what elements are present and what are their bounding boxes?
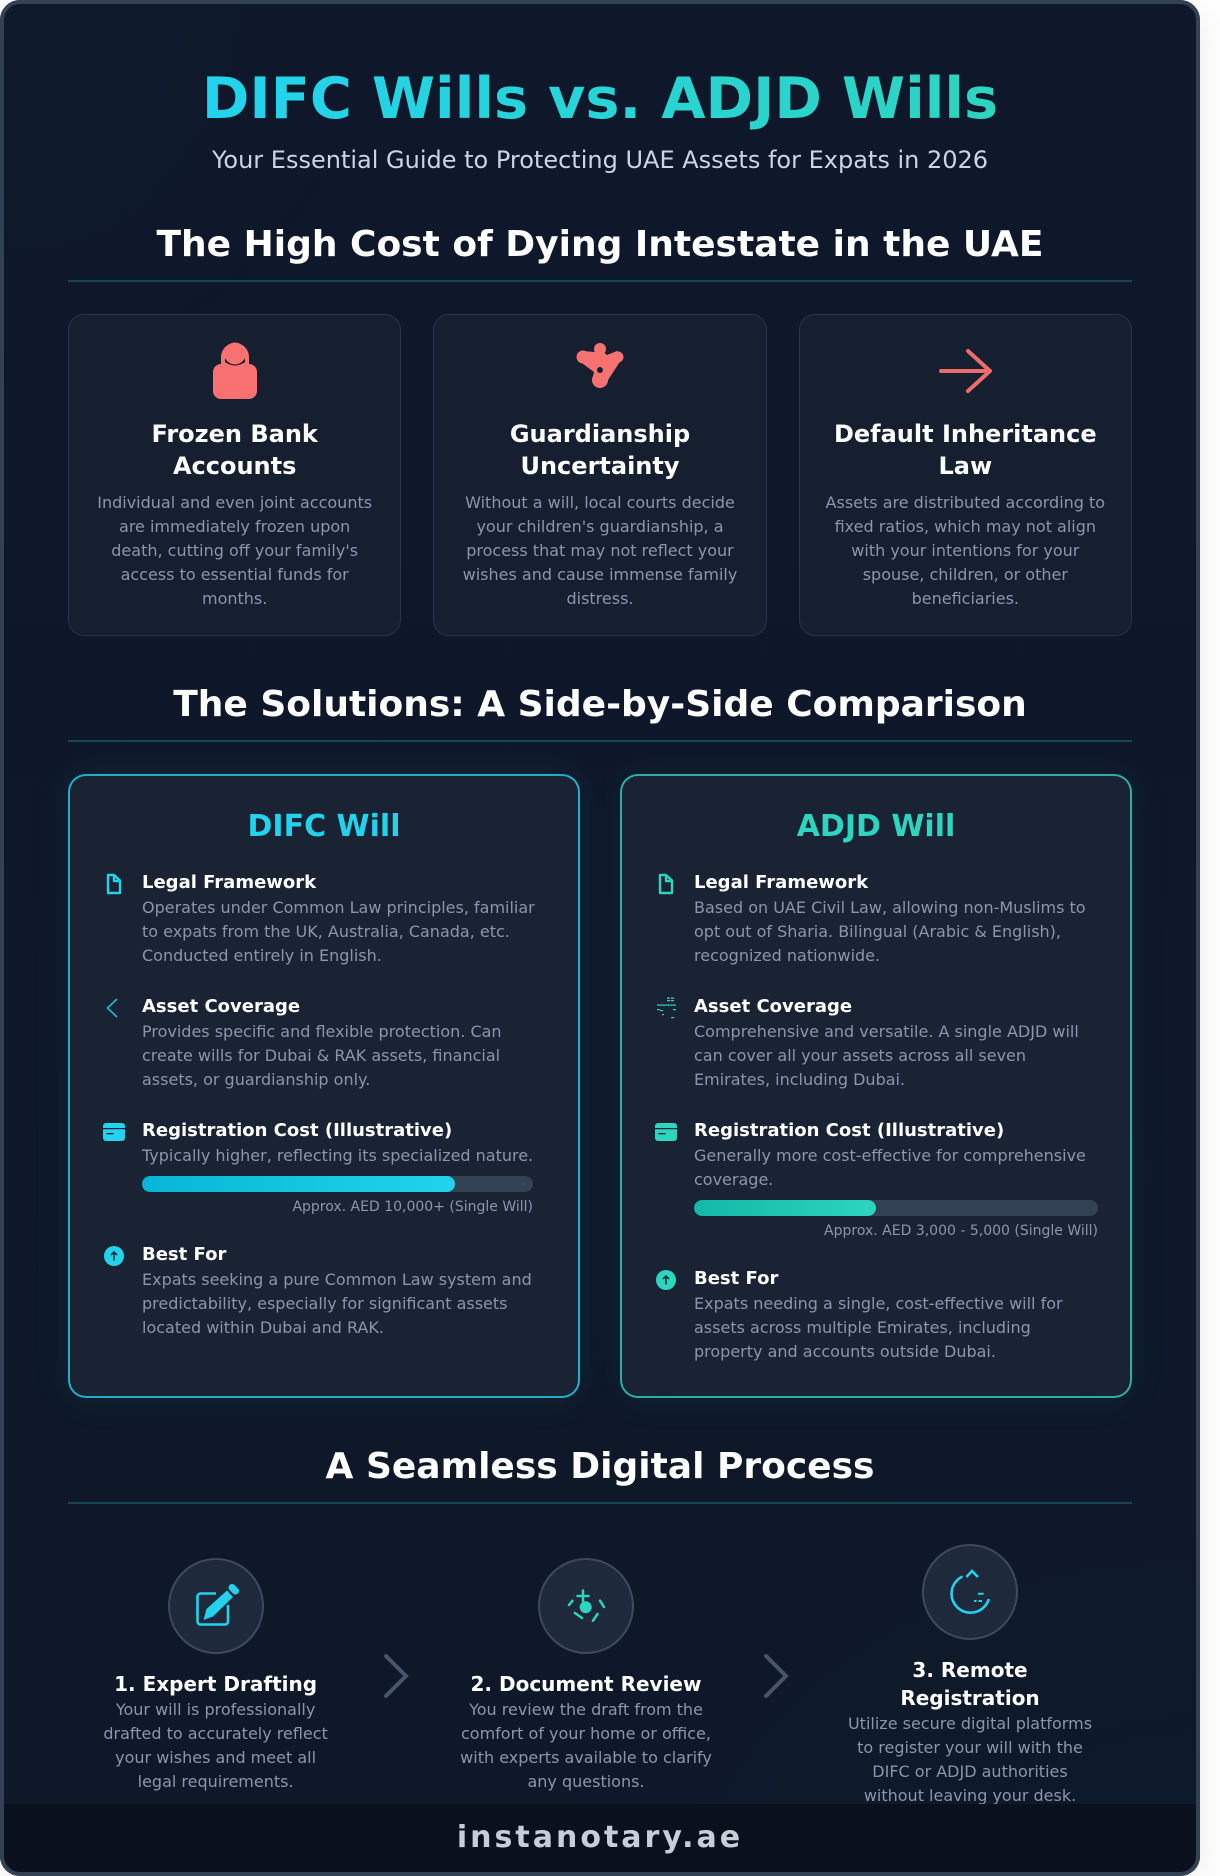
step 3 text: DIFC or ADJD authorities: [872, 1762, 1068, 1781]
item: best for: Expats needing a single, cost-effective will for: [694, 1294, 1063, 1313]
item: asset coverage: [694, 996, 1079, 1089]
item: registration cost: Registration Cost (Illustrative): [142, 1120, 452, 1141]
heading: process section: A Seamless Digital Process: [326, 1446, 874, 1487]
step 1 text: 1. Expert Drafting: [114, 1672, 317, 1696]
step 3 text: [848, 1658, 1092, 1805]
step 3 text: 3. Remote: [912, 1658, 1028, 1682]
bar label: Approx. AED 3,000 - 5,000 (Single Will): [824, 1223, 1098, 1239]
item: legal framework: [694, 872, 1086, 965]
item: legal framework: to expats from the UK, Australia, Canada, etc.: [142, 922, 510, 941]
icon: step 1 badge: [168, 1558, 264, 1654]
card text: Assets are distributed according to: [826, 493, 1105, 512]
heading: intestate section: The High Cost of Dying Intestate in the UAE: [156, 224, 1044, 265]
card heading: Accounts: [173, 452, 296, 480]
item: registration cost: Registration Cost (Illustrative): [694, 1120, 1004, 1141]
item: registration cost: Typically higher, reflecting its specialized nature.: [142, 1146, 533, 1165]
card heading: Law: [938, 452, 992, 480]
item: asset coverage: Provides specific and flexible protection. Can: [142, 1022, 502, 1041]
step 2 text: any questions.: [527, 1772, 645, 1791]
card heading: Frozen Bank: [151, 420, 318, 448]
card text: beneficiaries.: [912, 589, 1019, 608]
panel: frozen bank accounts: [68, 314, 401, 636]
icon: guardianship figure: [576, 343, 624, 388]
item: asset coverage: Asset Coverage: [694, 996, 852, 1017]
item: legal framework: Based on UAE Civil Law, allowing non-Muslims to: [694, 898, 1086, 917]
card text: your children's guardianship, a: [476, 517, 724, 536]
card text: spouse, children, or other: [863, 565, 1068, 584]
card heading: [510, 420, 690, 480]
card text: with your intentions for your: [851, 541, 1079, 560]
icon: lock: [213, 342, 257, 399]
card heading: Guardianship: [510, 420, 690, 448]
card text: wishes and cause immense family: [463, 565, 737, 584]
bar label: Approx. AED 10,000+ (Single Will): [292, 1199, 533, 1215]
step 3 text: Utilize secure digital platforms: [848, 1714, 1092, 1733]
card heading: [151, 420, 318, 480]
step 1 text: drafted to accurately reflect: [103, 1724, 328, 1743]
item: registration cost: [142, 1120, 533, 1165]
item: asset coverage: Comprehensive and versatile. A single ADJD will: [694, 1022, 1079, 1041]
item: registration cost: Generally more cost-effective for comprehensive: [694, 1146, 1086, 1165]
card text: [826, 493, 1105, 608]
card text: fixed ratios, which may not align: [835, 517, 1096, 536]
icon: document: [658, 874, 674, 894]
step 3 text: to register your will with the: [857, 1738, 1083, 1757]
step 1 text: [103, 1672, 328, 1791]
icon: chevron: [106, 998, 118, 1018]
item: legal framework: Conducted entirely in English.: [142, 946, 382, 965]
icon: step 3 badge: [922, 1544, 1018, 1640]
icon: dashed coverage: [657, 998, 676, 1018]
item: best for: property and accounts outside Dubai.: [694, 1342, 996, 1361]
icon: arrow: [939, 348, 992, 394]
icon: credit card: [655, 1123, 677, 1141]
item: registration cost: [694, 1120, 1086, 1189]
card text: Without a will, local courts decide: [465, 493, 735, 512]
item: asset coverage: Emirates, including Dubai.: [694, 1070, 905, 1089]
step 2 text: comfort of your home or office,: [461, 1724, 711, 1743]
item: asset coverage: create wills for Dubai & RAK assets, financial: [142, 1046, 500, 1065]
heading: comparison section: The Solutions: A Side-by-Side Comparison: [173, 684, 1027, 725]
step 2 text: with experts available to clarify: [460, 1748, 712, 1767]
icon: arrow up circle: [104, 1246, 124, 1266]
card text: Individual and even joint accounts: [97, 493, 372, 512]
item: best for: Expats seeking a pure Common Law system and: [142, 1270, 532, 1289]
card heading: Default Inheritance: [834, 420, 1097, 448]
card text: [463, 493, 737, 608]
panel: ADJD will: [620, 774, 1132, 1398]
step 2 text: You review the draft from the: [469, 1700, 703, 1719]
panel: default inheritance law: [799, 314, 1132, 636]
card heading: Uncertainty: [520, 452, 680, 480]
arrow: step 1 to 2: [384, 1654, 409, 1698]
item: best for: located within Dubai and RAK.: [142, 1318, 384, 1337]
panel: DIFC will: [68, 774, 580, 1398]
item: legal framework: recognized nationwide.: [694, 946, 880, 965]
item: legal framework: Legal Framework: [694, 872, 868, 893]
item: best for: Best For: [142, 1244, 226, 1265]
item: best for: assets across multiple Emirates, including: [694, 1318, 1031, 1337]
item: legal framework: opt out of Sharia. Bilingual (Arabic & English),: [694, 922, 1061, 941]
item: legal framework: Operates under Common Law principles, familiar: [142, 898, 535, 917]
icon: credit card: [103, 1123, 125, 1141]
card text: death, cutting off your family's: [111, 541, 358, 560]
item: asset coverage: assets, or guardianship only.: [142, 1070, 370, 1089]
icon: document: [106, 874, 122, 894]
footer: [0, 1804, 1200, 1872]
item: best for: [694, 1268, 1063, 1361]
card text: distress.: [566, 589, 634, 608]
step 2 text: [460, 1672, 712, 1791]
panel heading: ADJD Will: [797, 809, 955, 844]
step 3 text: Registration: [900, 1686, 1040, 1710]
card text: are immediately frozen upon: [119, 517, 350, 536]
card text: process that may not reflect your: [466, 541, 734, 560]
subtitle: Your Essential Guide to Protecting UAE Assets for Expats in 2026: [212, 146, 988, 174]
item: asset coverage: can cover all your assets across all seven: [694, 1046, 1026, 1065]
item: asset coverage: Asset Coverage: [142, 996, 300, 1017]
icon: step 2 badge: [538, 1558, 634, 1654]
step 3 text: without leaving your desk.: [864, 1786, 1076, 1805]
item: asset coverage: [142, 996, 502, 1089]
bar: DIFC cost: [142, 1176, 533, 1192]
item: best for: [142, 1244, 532, 1337]
card text: months.: [202, 589, 267, 608]
footer: instanotary.ae: [457, 1820, 743, 1855]
card text: access to essential funds for: [121, 565, 349, 584]
item: best for: predictability, especially for significant assets: [142, 1294, 508, 1313]
bar: ADJD cost: [694, 1200, 1098, 1216]
arrow: step 2 to 3: [764, 1654, 789, 1698]
step 1 text: Your will is professionally: [116, 1700, 315, 1719]
card text: [97, 493, 372, 608]
step 2 text: 2. Document Review: [470, 1672, 701, 1696]
step 1 text: legal requirements.: [138, 1772, 294, 1791]
card heading: [834, 420, 1097, 480]
item: registration cost: coverage.: [694, 1170, 773, 1189]
icon: arrow up circle: [656, 1270, 676, 1290]
item: legal framework: [142, 872, 535, 965]
title: DIFC Wills vs. ADJD Wills: [202, 65, 998, 132]
item: legal framework: Legal Framework: [142, 872, 316, 893]
panel: guardianship uncertainty: [433, 314, 767, 636]
panel heading: DIFC Will: [248, 809, 400, 844]
step 1 text: your wishes and meet all: [115, 1748, 316, 1767]
item: best for: Best For: [694, 1268, 778, 1289]
